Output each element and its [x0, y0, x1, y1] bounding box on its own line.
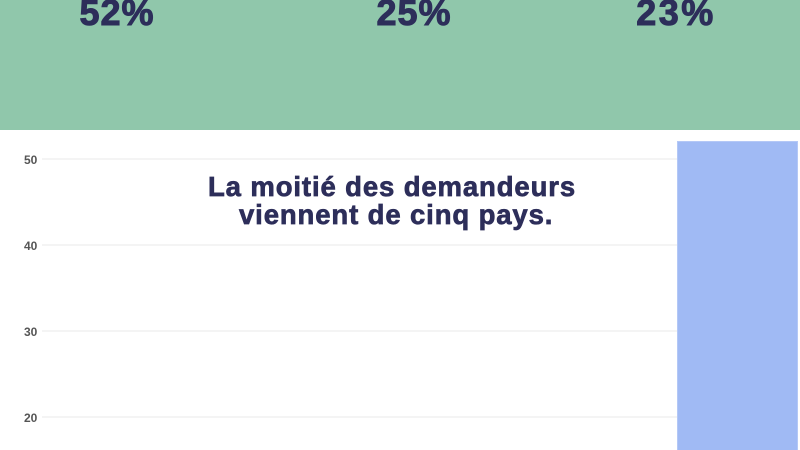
title line 1: La moitié des demandeurs	[208, 171, 576, 202]
title line 2: viennent de cinq pays.	[239, 199, 553, 230]
y-axis label: 40: 40	[24, 239, 37, 253]
bar chart	[24, 141, 798, 450]
y-axis label: 30: 30	[24, 325, 37, 339]
y-axis label: 20: 20	[24, 411, 37, 425]
y-axis label: 50: 50	[24, 153, 37, 167]
bar: 52	[677, 141, 798, 450]
panel: green statistics band	[0, 0, 800, 130]
chart title	[208, 171, 576, 230]
